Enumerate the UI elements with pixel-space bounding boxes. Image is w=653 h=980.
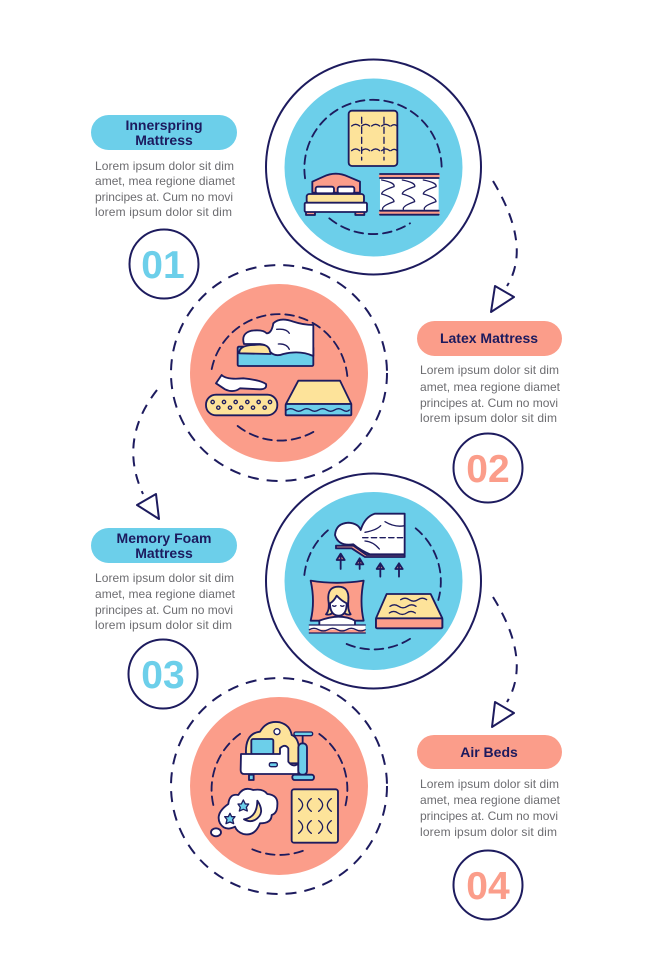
heading pill: Innerspring: [125, 117, 203, 133]
heading pill: Mattress: [135, 132, 193, 148]
text block: Lorem ipsum dolor sit dim: [95, 159, 234, 173]
heading pill: [91, 528, 237, 563]
icon: sleeper on latex, hand pressing foam, mattress: [206, 314, 351, 441]
text block: [420, 777, 561, 839]
number badge 04: 04: [466, 865, 510, 908]
text block: lorem ipsum dolor sit dim: [420, 411, 557, 425]
heading pill: [417, 735, 562, 769]
text block: principes at. Cum no movi: [420, 809, 558, 823]
arrow: step 1 to step 2: [491, 181, 517, 312]
icon: body contour, sleeping woman and foam mattress: [304, 514, 442, 649]
number badge 01: [130, 230, 198, 298]
panel: air beds circle: [171, 678, 387, 894]
number badge 01: 01: [141, 244, 185, 287]
text block: amet, mea regione diamet: [420, 793, 561, 807]
text block: principes at. Cum no movi: [95, 190, 233, 204]
text block: lorem ipsum dolor sit dim: [95, 618, 232, 632]
number badge 03: [128, 640, 198, 708]
text block: [420, 363, 561, 425]
text block: lorem ipsum dolor sit dim: [95, 205, 232, 219]
text block: lorem ipsum dolor sit dim: [420, 825, 557, 839]
text block: principes at. Cum no movi: [95, 603, 233, 617]
icon: air bed and pump, dream cloud, mattress: [211, 722, 347, 855]
step 1: innerspring mattress: [91, 115, 237, 298]
arrow: step 2 to step 3: [133, 390, 159, 519]
heading pill: Air Beds: [460, 744, 518, 760]
panel: memory foam mattress circle: [266, 474, 481, 688]
number badge 02: 02: [466, 448, 510, 491]
panel: latex mattress circle: [171, 265, 387, 481]
text block: amet, mea regione diamet: [95, 587, 236, 601]
text block: Lorem ipsum dolor sit dim: [420, 363, 559, 377]
number badge 02: [454, 434, 522, 502]
heading pill: Mattress: [135, 545, 193, 561]
text block: amet, mea regione diamet: [420, 380, 561, 394]
text block: principes at. Cum no movi: [420, 396, 558, 410]
arrow: step 3 to step 4: [492, 597, 517, 727]
step 3: memory foam mattress: [91, 528, 237, 708]
text block: amet, mea regione diamet: [95, 174, 236, 188]
text block: [95, 159, 236, 219]
heading pill: [91, 115, 237, 150]
heading pill: Latex Mattress: [440, 330, 538, 346]
number badge 03: 03: [141, 654, 185, 697]
text block: [95, 571, 236, 632]
text block: Lorem ipsum dolor sit dim: [420, 777, 559, 791]
panel: innerspring mattress circle: [266, 60, 481, 274]
step 2: latex mattress: [417, 321, 562, 502]
heading pill: [417, 321, 562, 356]
text block: Lorem ipsum dolor sit dim: [95, 571, 234, 585]
number badge 04: [454, 850, 522, 920]
step 4: air beds: [417, 735, 562, 920]
heading pill: Memory Foam: [117, 530, 211, 546]
icon: innerspring mattress, bed and coils: [304, 100, 442, 234]
